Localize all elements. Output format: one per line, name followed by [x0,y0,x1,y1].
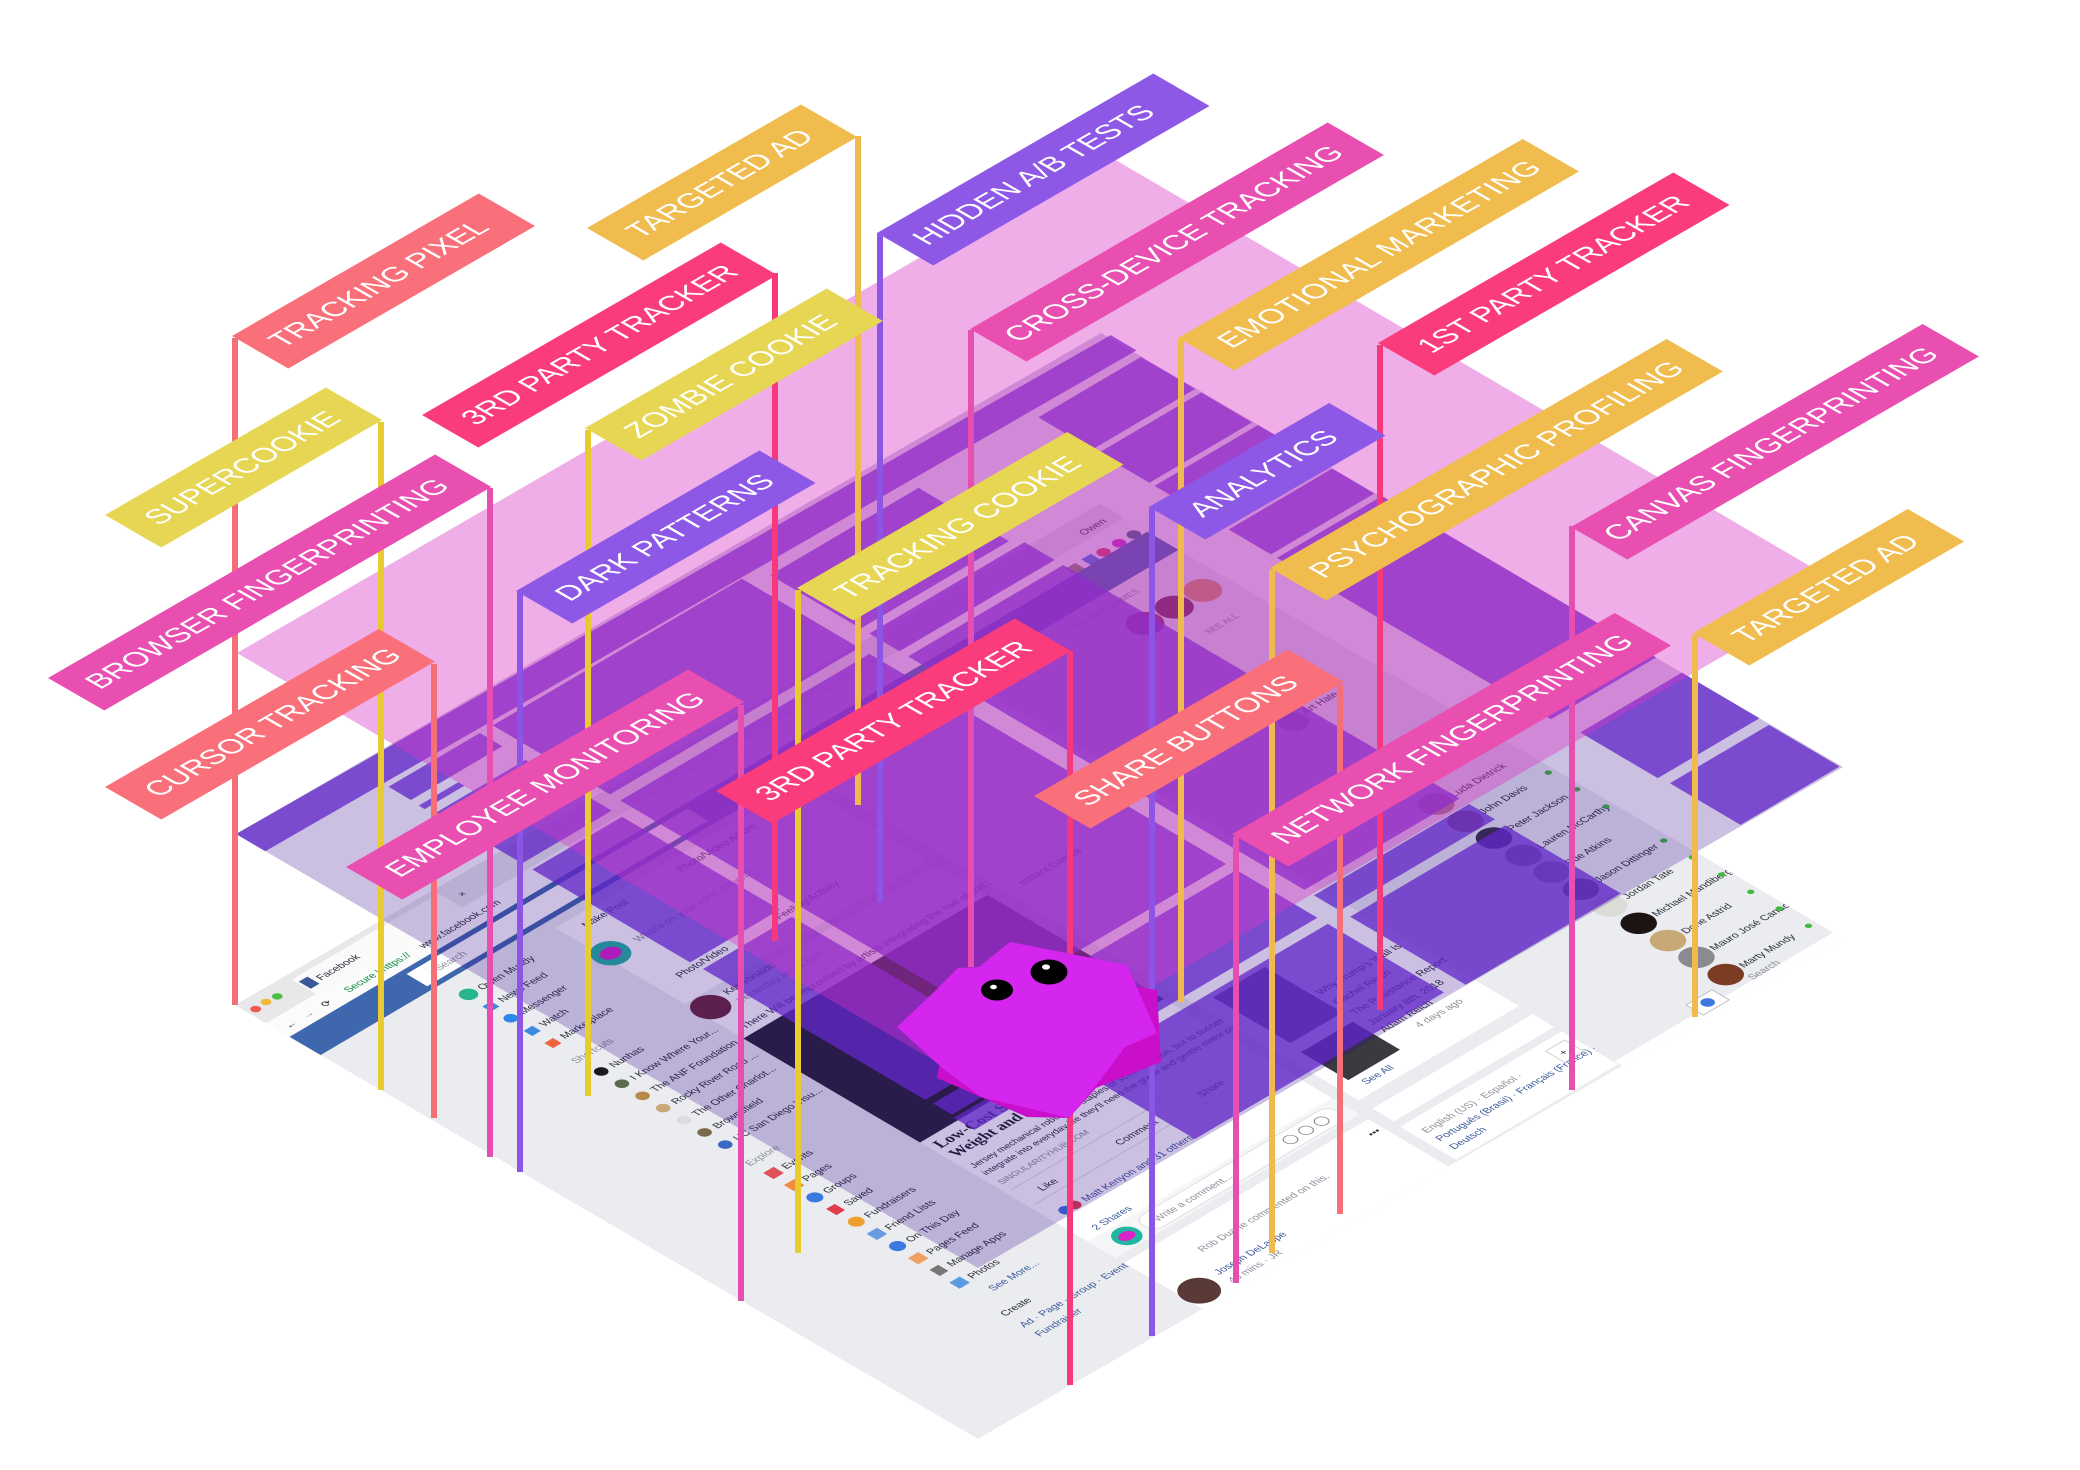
tag: TARGETED AD (right) [1692,509,1964,1017]
layer: translucent pink plane [237,152,1844,1087]
layer: browser screenshot plane: Owen [1076,517,1110,537]
right column panels: English (US) · Español · [1419,1072,1526,1135]
right column panels: See All [1359,1064,1397,1086]
tag: 1ST PARTY TRACKER [1377,172,1730,1010]
feed column: Make Post [579,898,632,929]
sidebar list: Saved [841,1186,877,1207]
feed column: Rob Duarte commented on this. [1195,1172,1333,1254]
sidebar list: Rocky River Road ... [668,1051,762,1106]
tag: TRACKING COOKIE [795,432,1123,1253]
sidebar list: Groups [820,1172,860,1195]
sidebar list: Pages [799,1162,835,1183]
tag: BROWSER FINGERPRINTING: BROWSER FINGERPRINTING [78,475,457,694]
tag: CROSS-DEVICE TRACKING: CROSS-DEVICE TRACKING [997,142,1352,347]
layer: purple wireframe blocks [236,327,1843,1272]
feed column: Joseph DeLappe [1211,1230,1290,1277]
tag: SHARE BUTTONS: SHARE BUTTONS [1066,672,1307,811]
tag: HIDDEN A/B TESTS: HIDDEN A/B TESTS [906,101,1163,250]
feed column: Photo/Video Album [674,822,761,874]
right column panels: Deutsch [1447,1125,1490,1151]
right column panels: Português (Brasil) · Français (France) · [1433,1044,1600,1143]
feed column: Photo/Video [673,945,732,980]
feed column: Live Video [777,782,830,813]
chat sidebar: INSTANT GAMES [1071,587,1142,629]
chat sidebar: Jordan Tate [1620,867,1677,901]
chat sidebar: Mauro José Canaccioli [1707,892,1809,952]
right column panels: The Resistance Report [1347,956,1450,1017]
sidebar list: Fundraiser [1032,1307,1086,1338]
chat sidebar [1074,578,1812,1016]
feed column: Yesterday at 9:12am [734,950,827,1004]
right column panels: Why Trump's Wall Is [1313,942,1405,996]
tag: 3RD PARTY TRACKER (lower) [716,618,1073,1385]
chat sidebar: John Davis [1476,784,1531,816]
chat sidebar: SEE ALL [1202,612,1242,636]
layer: browser screenshot plane: Search [431,949,471,973]
sidebar list: The ANF Foundation [648,1038,742,1094]
layer: browser screenshot plane: → [299,1009,318,1020]
right column panels: Rachel Reich [1330,969,1395,1007]
sidebar list: News Feed [495,971,551,1004]
feed column: ••• [1365,1127,1385,1138]
sidebar list [458,956,1129,1336]
tag: CURSOR TRACKING: CURSOR TRACKING [137,644,410,802]
feed column: Ken Rinaldo [720,961,780,996]
tag: TRACKING PIXEL: TRACKING PIXEL [261,216,497,352]
chat sidebar: Lauren McCarthy [1534,803,1614,850]
sidebar list: Events [779,1149,817,1171]
sidebar list: Messenger [516,983,571,1016]
sidebar list: The Other Charlot... [689,1065,779,1118]
feed column: Low-Cost Soft Robot Maker Could [930,1020,1151,1151]
layer: browser screenshot plane: Facebook [313,952,364,982]
feed column: What's on your mind, Owen? [631,869,757,944]
tag: DARK PATTERNS [516,450,816,1172]
icon: magenta blob creature [897,942,1161,1118]
tag: SHARE BUTTONS [1034,650,1344,1214]
tag: PSYCHOGRAPHIC PROFILING: PSYCHOGRAPHIC PROFILING [1302,357,1692,583]
feed column [556,824,1448,1309]
tag: PSYCHOGRAPHIC PROFILING [1269,339,1723,1253]
tag: TARGETED AD (upper) [587,104,861,805]
tag: HIDDEN A/B TESTS [877,74,1210,902]
tag: CANVAS FINGERPRINTING [1569,324,1979,1090]
tag: TARGETED AD (right): TARGETED AD [1725,530,1928,648]
sidebar list: Watch [537,1007,572,1028]
feed column: integrate into everyday life they'll need the grace and gentle motor control. [979,1013,1257,1177]
layer: browser screenshot plane: Secure | https:// [341,951,415,994]
tag: NETWORK FINGERPRINTING [1232,613,1671,1283]
sidebar list: Brownsfield [710,1097,767,1130]
tag: ZOMBIE COOKIE [585,288,883,1096]
chat sidebar: Sue Atkins [1562,836,1615,867]
feed column: Weight and Self-Healing [945,1066,1104,1160]
sidebar list: Owen Mundy [475,954,539,992]
sidebar list: Fundraisers [861,1185,920,1220]
sidebar list: On This Day [903,1208,964,1244]
chat sidebar: Luda Dietrick [1447,761,1510,799]
layer: browser screenshot plane: ⟳ [318,998,336,1009]
chat sidebar: Michael Mandiberg [1649,867,1736,918]
chat sidebar: Jason Dittinger [1591,842,1662,884]
sidebar list: Photos [965,1258,1003,1281]
feed column: Like [1035,1177,1062,1193]
tag: 3RD PARTY TRACKER (lower): 3RD PARTY TRACKER [748,637,1040,806]
tag: ZOMBIE COOKIE: ZOMBIE COOKIE [617,311,846,443]
feed column: 2 Shares [1089,1204,1135,1232]
sidebar list: Pages Feed [923,1221,983,1256]
feed column: Feeling/Activity [772,879,844,921]
feed column: Matt Kenyon and 31 others [1079,1133,1198,1203]
feed column: Jersey mechanical robots are staples of science fiction, but to successfully [967,1006,1246,1170]
layer: browser screenshot plane: ← [282,1019,301,1030]
sidebar list: See More... [985,1259,1043,1293]
tag: SUPERCOOKIE [105,388,384,1090]
tag: ANALYTICS: ANALYTICS [1181,426,1346,522]
tag: CURSOR TRACKING [105,629,437,1118]
right column panels [967,702,1842,1160]
feed column: SINGULARITYHUB.COM [995,1129,1092,1186]
sidebar list: Create [998,1296,1035,1318]
tag: NETWORK FINGERPRINTING: NETWORK FINGERPRINTING [1264,630,1642,849]
sidebar list: Shortcuts [568,1037,617,1065]
feed column: Comment [1112,1118,1162,1147]
layer: browser screenshot plane: × [455,890,470,899]
sidebar list: I Know Where Your... [627,1026,722,1082]
chat sidebar: Peter Jackson [1504,793,1572,833]
tag: EMOTIONAL MARKETING: EMOTIONAL MARKETING [1210,156,1550,353]
tag: TRACKING COOKIE: TRACKING COOKIE [827,452,1089,604]
right column panels: 4 days ago [1412,997,1467,1029]
feed column: There Will be Improvised by artists integrating the rise of soft robotics [737,862,1025,1031]
right column panels: January 8th, 2018 [1365,978,1448,1027]
tag: SUPERCOOKIE: SUPERCOOKIE [137,407,349,530]
tag: DARK PATTERNS: DARK PATTERNS [548,470,783,606]
right column panels: Instant Games [1016,847,1085,887]
tag: 3RD PARTY TRACKER (upper): 3RD PARTY TRACKER [454,261,746,430]
layer: browser screenshot plane [235,488,1860,1445]
feed column: Share [1194,1078,1229,1099]
tag: TRACKING PIXEL [232,194,535,1005]
chat sidebar: Art Hate [1298,690,1342,716]
feed column: Write a comment... [1150,1173,1236,1223]
sidebar list: UC San Diego Visu... [730,1086,826,1143]
sidebar list: Nunhas [606,1045,648,1069]
chat sidebar: Marty Mundy [1736,932,1799,969]
tag: CANVAS FINGERPRINTING: CANVAS FINGERPRINTING [1596,343,1947,546]
sidebar list: Marketplace [557,1005,617,1041]
sidebar list: Explore [743,1144,784,1168]
sidebar list: Friend Lists [882,1198,939,1232]
sidebar list: Manage Apps [944,1230,1010,1268]
tag: BROWSER FINGERPRINTING [48,454,493,1157]
chat sidebar: Search [1745,959,1784,982]
tag: EMPLOYEE MONITORING [346,670,744,1301]
sidebar list: Ad · Page · Group · Event · [1016,1258,1137,1329]
tag: EMOTIONAL MARKETING [1178,139,1579,1002]
tag: 1ST PARTY TRACKER: 1ST PARTY TRACKER [1410,191,1698,358]
tag: 3RD PARTY TRACKER (upper) [422,242,778,941]
chat sidebar: Dorie Astrid [1678,902,1736,935]
chat sidebar: Surplus [1268,674,1309,698]
right column panels: Adam Reich [1377,999,1437,1034]
tag: TARGETED AD (upper): TARGETED AD [619,125,822,243]
right column panels: + [1556,1048,1572,1057]
tag: ANALYTICS [1149,403,1385,1336]
layer: browser screenshot plane: www.facebook.com [415,898,504,951]
tag: CROSS-DEVICE TRACKING [968,122,1384,967]
feed column: 46 mins · JR [1225,1248,1287,1285]
tag: EMPLOYEE MONITORING: EMPLOYEE MONITORING [378,688,714,882]
